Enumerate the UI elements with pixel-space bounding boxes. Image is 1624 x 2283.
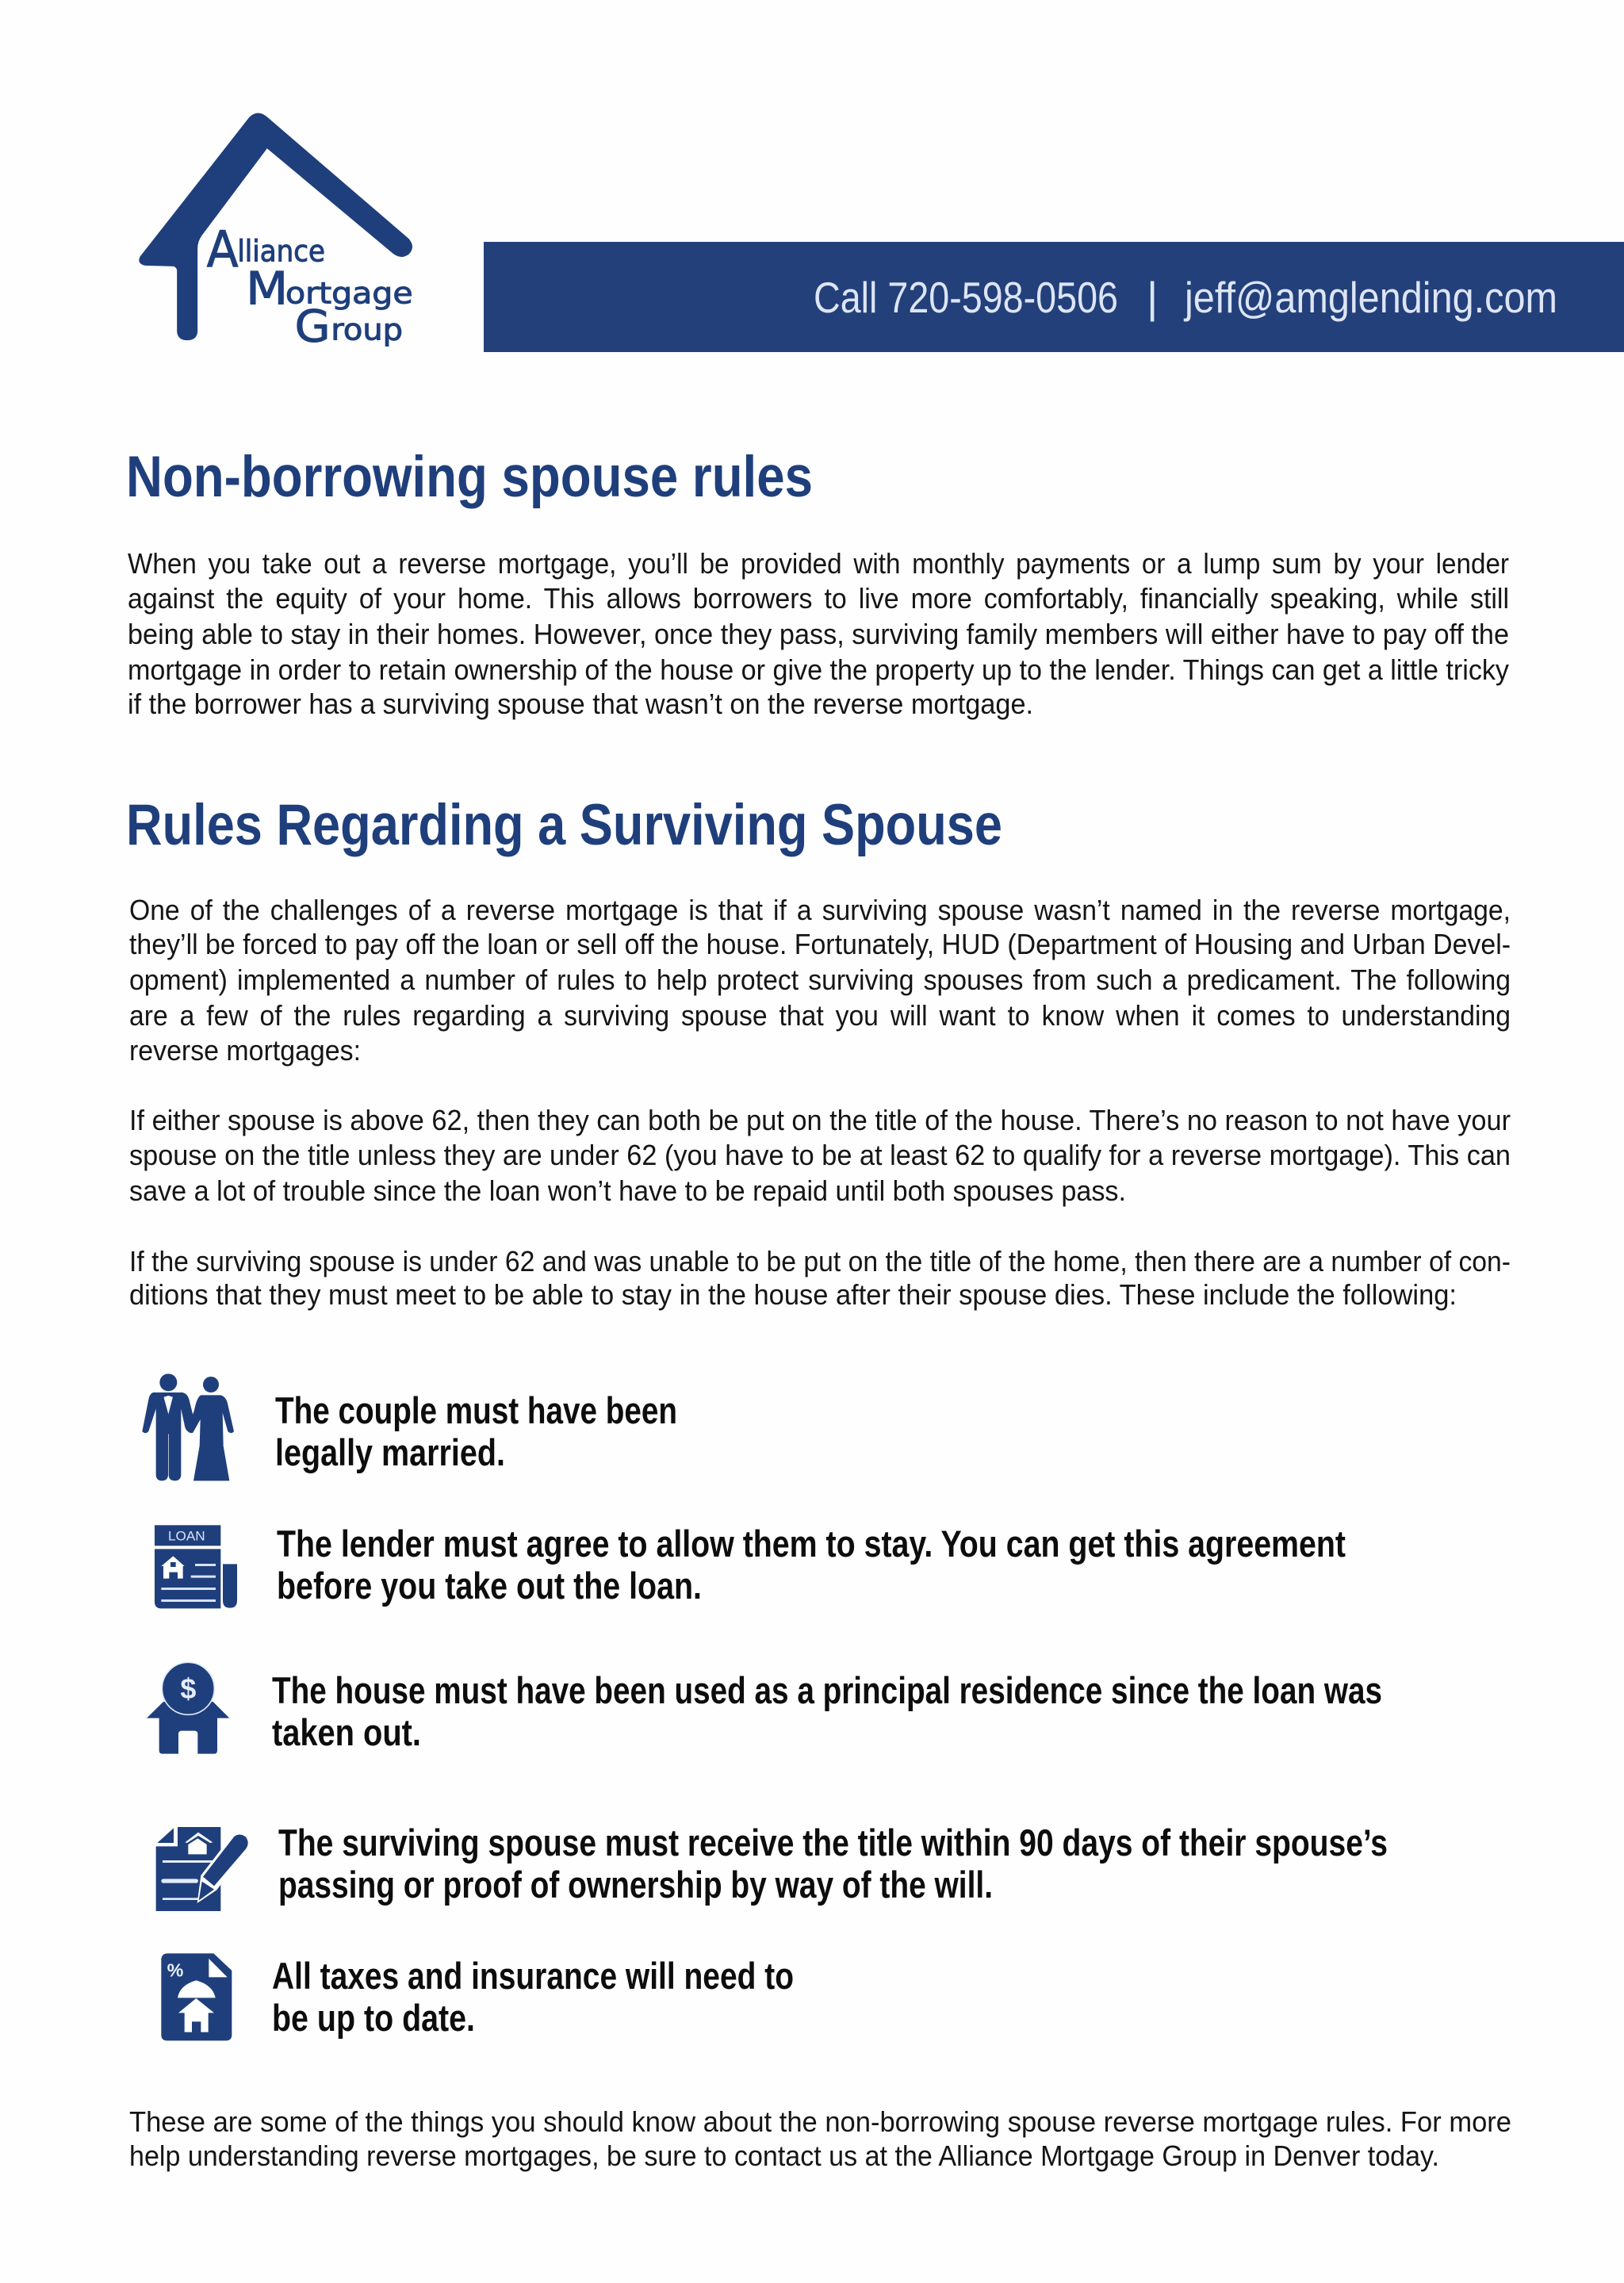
paragraph: either spouse above 62: save a lot of trouble since the loan won’t have to be repaid until both spouses pass. <box>129 1174 1126 1207</box>
logo house roof <box>140 113 412 339</box>
logo wordmark: A <box>207 220 239 279</box>
list item 5 text: be up to date. <box>272 1997 475 2039</box>
list item 4 text: passing or proof of ownership by way of the will. <box>278 1864 993 1906</box>
header contact bar: jeff@amglending.com <box>1183 273 1557 322</box>
logo wordmark: ortgage <box>285 276 413 311</box>
closing paragraph <box>129 2105 1511 2172</box>
header contact bar: | <box>1147 273 1158 322</box>
icon: taxes and insurance document <box>161 1953 232 2040</box>
list item 2 text: The lender must agree to allow them to stay. You can get this agreement <box>277 1523 1346 1565</box>
paragraph: challenges of a reverse mortgage: opment) implemented a number of rules to help protect surviving spouses from such a predicament. The following <box>129 963 1511 996</box>
percent sign: % <box>167 1960 184 1981</box>
header contact bar: Call 720-598-0506 <box>814 273 1118 322</box>
paragraph: challenges of a reverse mortgage: One of the challenges of a reverse mortgage is that if a surviving spouse wasn’t named in the reverse mortgage, <box>129 894 1511 926</box>
paragraph: either spouse above 62: If either spouse is above 62, then they can both be put on the title of the house. There’s no reason to not have your <box>129 1104 1511 1136</box>
intro paragraph: mortgage in order to retain ownership of the house or give the property up to the lender. Things can get a little tricky <box>128 653 1510 686</box>
list item 3 text: The house must have been used as a principal residence since the loan was <box>272 1669 1382 1711</box>
paragraph: challenges of a reverse mortgage: are a few of the rules regarding a surviving spouse that you will want to know when it comes to understanding <box>129 999 1511 1032</box>
list item 5 text: All taxes and insurance will need to <box>272 1955 794 1997</box>
logo wordmark: lliance <box>237 233 325 268</box>
list item 5 text <box>272 1955 794 2039</box>
icon: loan document <box>155 1525 237 1608</box>
intro paragraph <box>128 547 1510 720</box>
list item 1 text: The couple must have been <box>275 1389 677 1431</box>
paragraph: surviving spouse under 62: If the surviving spouse is under 62 and was unable to be put on the title of the home, then there are a number of con- <box>129 1245 1511 1277</box>
closing paragraph: These are some of the things you should know about the non-borrowing spouse reverse mortgage rules. For more <box>129 2105 1511 2138</box>
header contact bar <box>484 242 1624 352</box>
paragraph: surviving spouse under 62 <box>129 1245 1511 1311</box>
intro paragraph: being able to stay in their homes. However, once they pass, surviving family members will either have to pay off the <box>128 618 1509 650</box>
paragraph: surviving spouse under 62: ditions that they must meet to be able to stay in the house after their spouse dies. These include the following: <box>129 1278 1457 1311</box>
intro paragraph: if the borrower has a surviving spouse that wasn’t on the reverse mortgage. <box>128 688 1033 720</box>
list item 3 text: taken out. <box>272 1711 421 1753</box>
paragraph: challenges of a reverse mortgage: reverse mortgages: <box>129 1034 361 1067</box>
icon: married couple <box>142 1373 234 1481</box>
list item 3 text <box>272 1669 1382 1753</box>
icon: title document and pen <box>156 1827 250 1911</box>
intro paragraph: against the equity of your home. This allows borrowers to live more comfortably, financially speaking, while still <box>128 582 1509 615</box>
logo wordmark: G <box>295 301 331 352</box>
intro paragraph: When you take out a reverse mortgage, you’ll be provided with monthly payments or a lump sum by your lender <box>128 547 1509 580</box>
heading: Non-borrowing spouse rules: Non-borrowing spouse rules <box>126 445 813 509</box>
list item 2 text: before you take out the loan. <box>277 1565 702 1607</box>
loan label: LOAN <box>168 1528 205 1543</box>
closing paragraph: help understanding reverse mortgages, be sure to contact us at the Alliance Mortgage Group in Denver today. <box>129 2139 1439 2172</box>
list item 2 text <box>277 1523 1346 1607</box>
logo wordmark: roup <box>331 312 403 347</box>
list item 1 text <box>275 1389 677 1473</box>
paragraph: either spouse above 62 <box>129 1104 1511 1207</box>
logo wordmark: M <box>246 262 288 315</box>
list item 4 text <box>278 1821 1388 1906</box>
list item 4 text: The surviving spouse must receive the title within 90 days of their spouse’s <box>278 1821 1388 1864</box>
logo: Alliance Mortgage Group <box>140 113 413 352</box>
heading: Rules Regarding a Surviving Spouse: Rules Regarding a Surviving Spouse <box>126 793 1002 857</box>
paragraph: challenges of a reverse mortgage <box>129 894 1511 1067</box>
paragraph: challenges of a reverse mortgage: they’ll be forced to pay off the loan or sell off the house. Fortunately, HUD (Department of Housing and Urban Devel- <box>129 928 1511 960</box>
icon: house with dollar coin <box>147 1662 229 1754</box>
paragraph: either spouse above 62: spouse on the title unless they are under 62 (you have to be at least 62 to qualify for a reverse mortgage). This can <box>129 1139 1511 1171</box>
dollar sign: $ <box>180 1672 196 1705</box>
list item 1 text: legally married. <box>275 1431 505 1473</box>
logo wordmark <box>207 220 413 352</box>
